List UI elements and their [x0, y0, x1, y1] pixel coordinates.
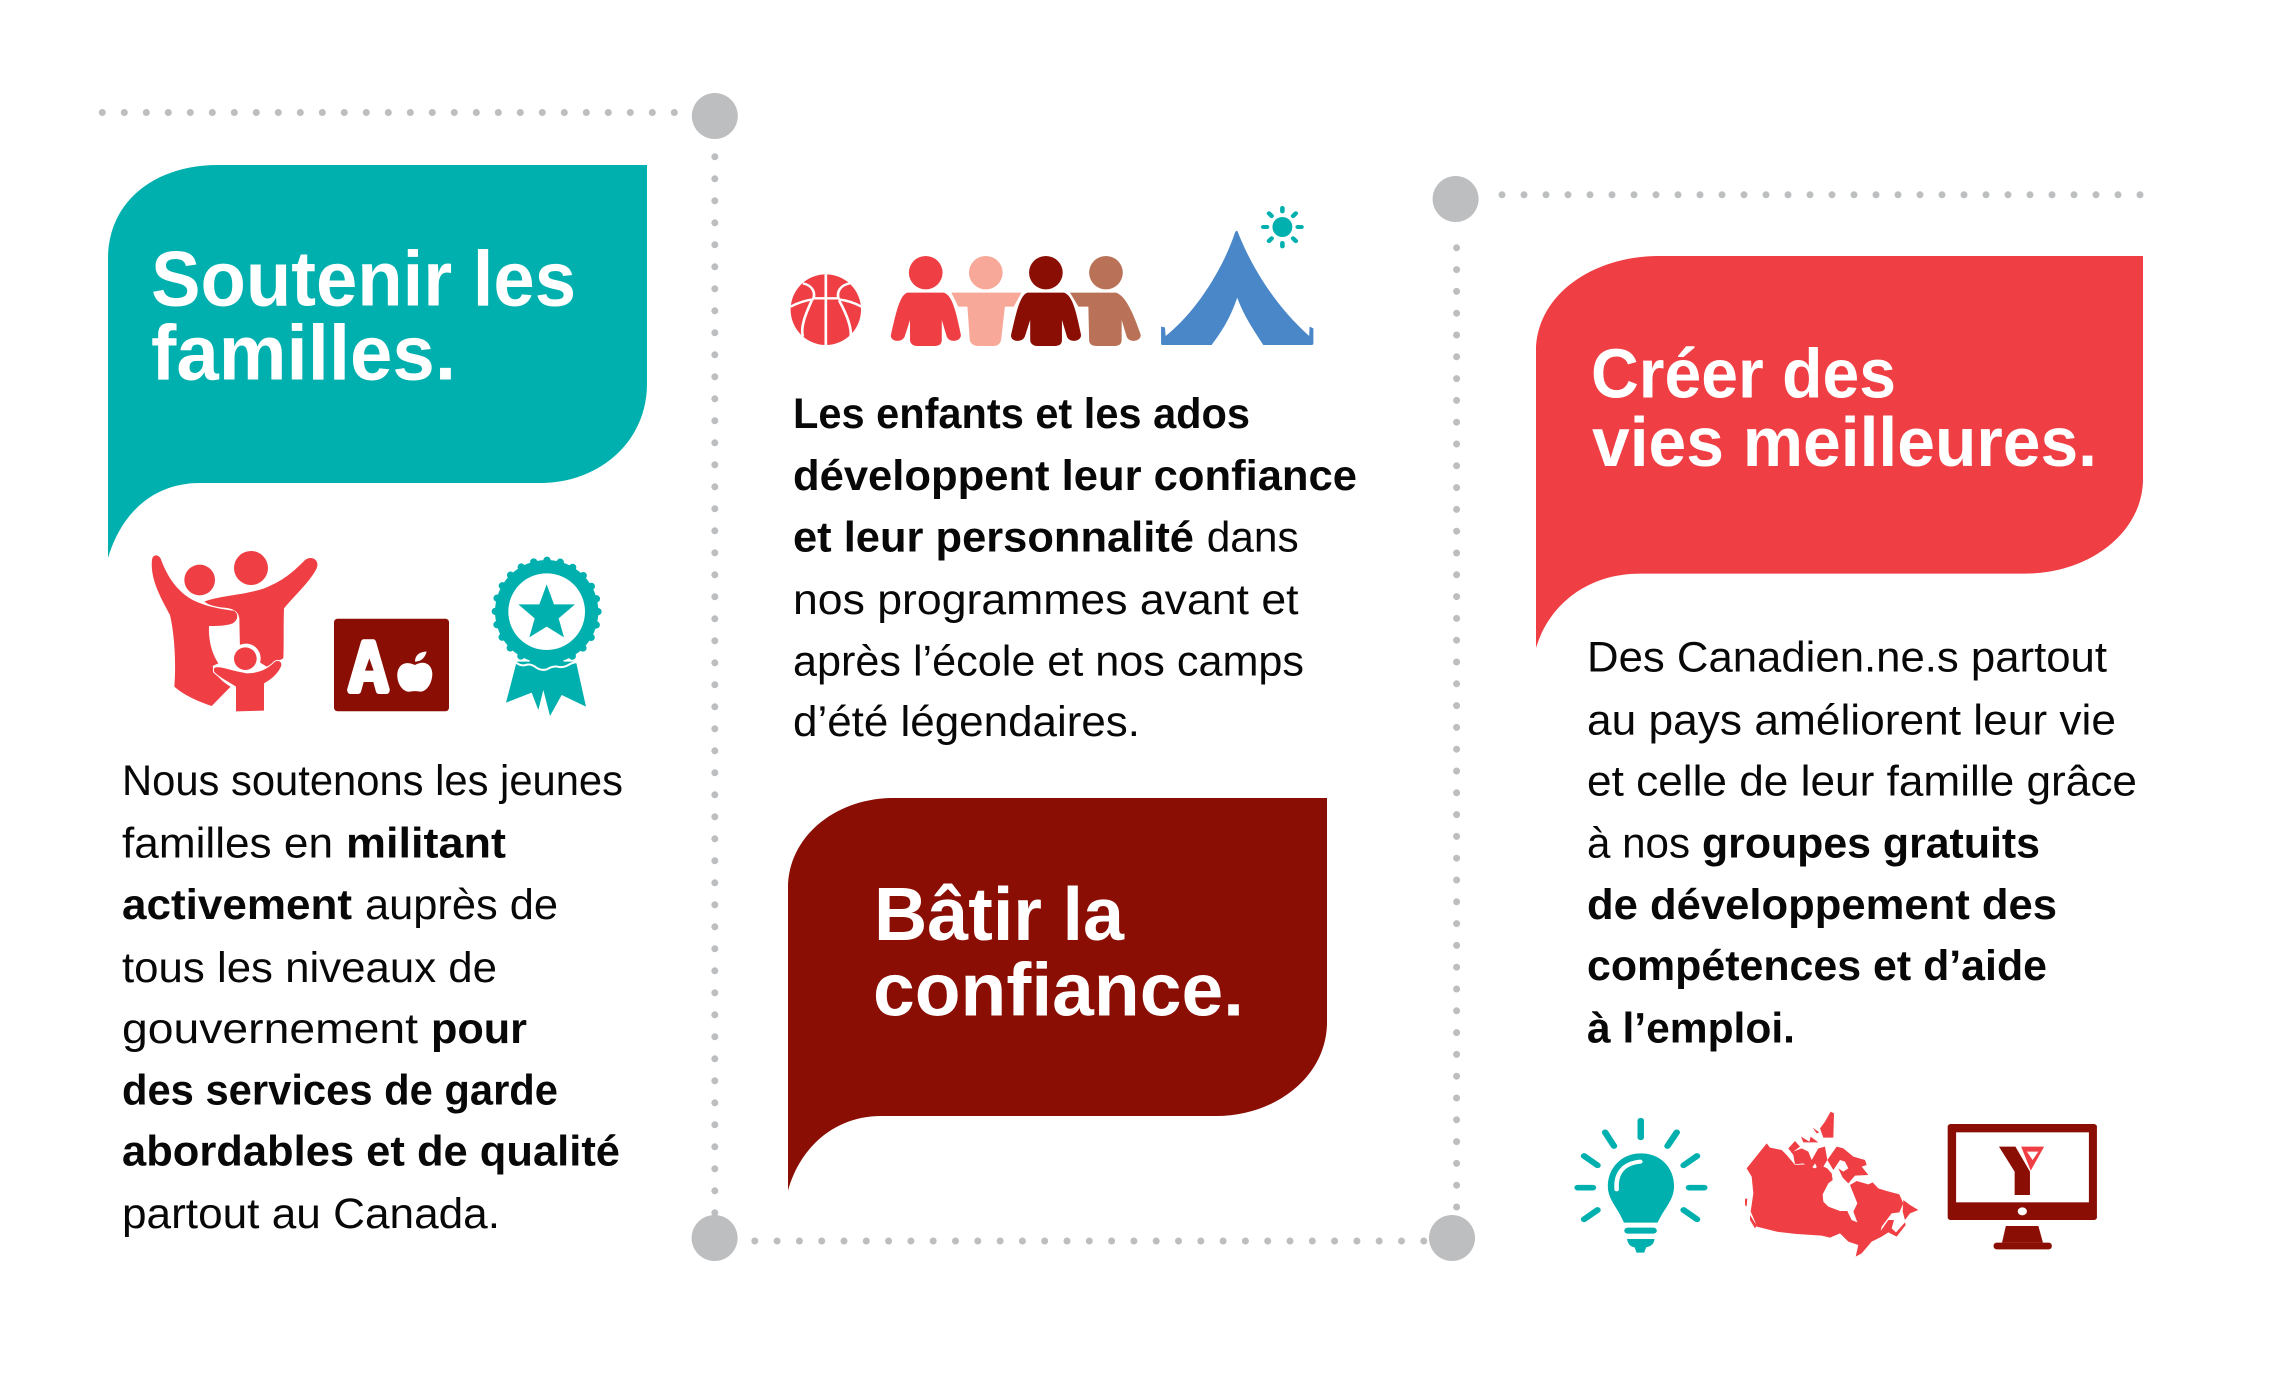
text block: Nous soutenons: activement	[122, 881, 352, 929]
text block: Des Canadien.ne.s	[1587, 634, 2137, 1052]
icon: award rosette	[495, 560, 598, 716]
text block: Nous soutenons: pour	[431, 1005, 527, 1053]
heading: Bâtir la confiance: confiance.	[873, 948, 1244, 1032]
text block: Nous soutenons: abordables et de qualité	[122, 1128, 620, 1176]
text block: Les enfants et les ados: après l’école et nos camps	[793, 638, 1304, 686]
heading: Créer des vies meilleures: vies meilleures.	[1592, 403, 2097, 481]
text block: Des Canadien.ne.s: compétences et d’aide	[1587, 942, 2047, 990]
text block: Des Canadien.ne.s: groupes gratuits	[1702, 820, 2040, 868]
text block: Nous soutenons: Nous soutenons les jeunes	[122, 757, 623, 805]
connector node: top right	[1433, 176, 1479, 222]
text block: Les enfants et les ados: d’été légendaires.	[793, 698, 1140, 746]
text block: Les enfants et les ados: dans	[1207, 514, 1299, 562]
text block: Nous soutenons: gouvernement	[122, 1005, 418, 1053]
heading: Soutenir les familles: Soutenir les	[151, 234, 576, 322]
panel: Soutenir les familles	[108, 165, 647, 1238]
heading: Bâtir la confiance	[873, 872, 1244, 1032]
panel: Créer des vies meilleures	[1536, 256, 2143, 1257]
text block: Des Canadien.ne.s: à nos	[1587, 820, 1690, 868]
panel: Bâtir la confiance	[788, 208, 1357, 1191]
text block: Les enfants et les ados: et leur personnalité	[793, 514, 1194, 562]
text block: Des Canadien.ne.s: de développement des	[1587, 881, 2057, 929]
connector node: bottom right	[1429, 1215, 1475, 1261]
text block: Des Canadien.ne.s: à l’emploi.	[1587, 1004, 1795, 1052]
text block: Les enfants et les ados: Les enfants et les ados	[793, 390, 1250, 438]
icon: monitor with Y logo	[1948, 1124, 2097, 1249]
text block: Nous soutenons: militant	[346, 820, 506, 868]
connector node: top left	[692, 93, 738, 139]
icon: light bulb	[1578, 1121, 1704, 1253]
heading: Créer des vies meilleures: Créer des	[1591, 334, 1896, 412]
speech bubble: teal	[108, 165, 647, 558]
icon: tent and sun	[1161, 208, 1313, 345]
text block: Les enfants et les ados: nos programmes avant et	[793, 576, 1299, 624]
icon: family	[152, 551, 317, 711]
text block: Nous soutenons: auprès de	[365, 881, 558, 929]
text block: Des Canadien.ne.s: et celle de leur famille grâce	[1587, 758, 2137, 806]
icon: grade A with apple: A	[349, 629, 388, 705]
heading: Bâtir la confiance: Bâtir la	[874, 872, 1125, 956]
text block: Nous soutenons: familles en	[122, 820, 333, 868]
speech bubble: dark red	[788, 798, 1327, 1191]
text block: Nous soutenons: partout au Canada.	[122, 1190, 500, 1238]
heading: Créer des vies meilleures	[1591, 334, 2097, 481]
icon: basketball	[791, 274, 861, 345]
text block: Nous soutenons	[122, 757, 623, 1238]
text block: Des Canadien.ne.s: Des Canadien.ne.s partout	[1587, 634, 2107, 682]
connector node: bottom left	[692, 1215, 738, 1261]
icon: group of four children	[891, 256, 1141, 346]
text block: Nous soutenons: des services de garde	[122, 1066, 558, 1114]
speech bubble: red	[1536, 256, 2143, 648]
icon: grade A with apple	[334, 619, 449, 711]
text block: Les enfants et les ados	[793, 390, 1357, 746]
heading: Soutenir les familles	[151, 234, 576, 396]
heading: Soutenir les familles: familles.	[151, 308, 456, 396]
text block: Des Canadien.ne.s: au pays améliorent leur vie	[1587, 696, 2116, 744]
text block: Les enfants et les ados: développent leur confiance	[793, 452, 1357, 500]
icon: map of Canada	[1745, 1112, 1918, 1257]
text block: Nous soutenons: tous les niveaux de	[122, 944, 497, 992]
